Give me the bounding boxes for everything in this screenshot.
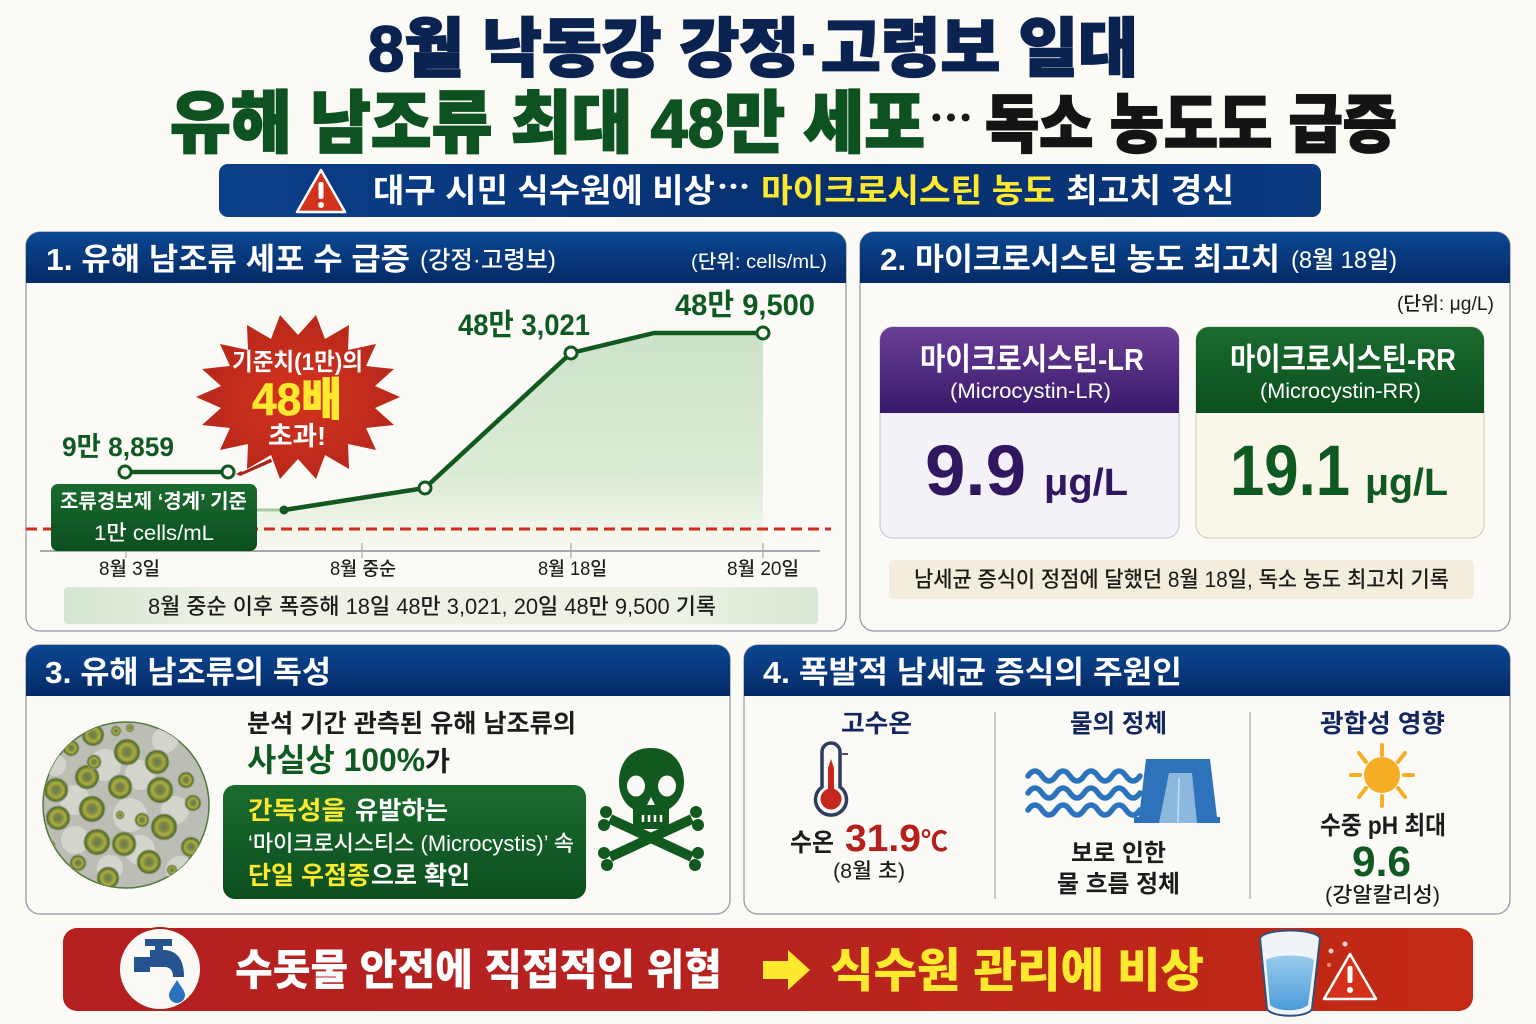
card: microcystin-RR: μg/L: [1365, 462, 1448, 504]
callout: threshold label: 1만 cells/mL: [94, 522, 214, 545]
heading: panel 2: (8월 18일): [1291, 247, 1397, 274]
callout: 48 times starburst: 48배: [252, 374, 342, 425]
callout: hepatotoxic dominant species: ‘마이크로시스티스 (Microcystis)’ 속: [248, 831, 574, 856]
callout: threshold label: [51, 484, 257, 551]
line chart: 48만 3,021: [458, 309, 590, 342]
callout: hepatotoxic dominant species: 으로 확인: [371, 862, 470, 890]
line chart: 8월 중순: [330, 558, 396, 580]
heading: panel 1: 1. 유해 남조류 세포 수 급증: [46, 242, 410, 277]
subtitle banner: 마이크로시스틴 농도: [761, 172, 1055, 209]
heading: panel 1: (강정·고령보): [420, 247, 556, 274]
callout: 48 times starburst: 초과!: [268, 421, 326, 451]
panel 2: microcystin: [860, 232, 1510, 631]
column: stagnant water: 보로 인한: [1071, 840, 1166, 867]
icon: water waves and weir: [1028, 759, 1220, 823]
column: photosynthesis: 수중 pH 최대: [1320, 812, 1446, 840]
callout: threshold label: 조류경보제 ‘경계’ 기준: [60, 490, 247, 513]
card: microcystin-LR: μg/L: [1044, 462, 1128, 504]
column: high water temperature: 고수온: [841, 710, 912, 738]
text: analysis result: 사실상 100%: [247, 742, 425, 778]
icon: warning triangle: [297, 170, 345, 212]
heading: panel 1: (단위: cells/mL): [691, 251, 827, 273]
column: high water temperature: 31.9: [845, 818, 921, 860]
column: photosynthesis: [1320, 710, 1446, 907]
column: stagnant water: 물의 정체: [1070, 710, 1167, 738]
line chart: 48만 9,500: [675, 289, 815, 322]
line chart: 8월 3일: [99, 558, 160, 580]
heading: panel 2: 2. 마이크로시스틴 농도 최고치: [880, 242, 1280, 277]
panel 4: causes: [744, 645, 1510, 914]
icon: warning triangle: [1324, 942, 1376, 999]
chart note: [64, 587, 818, 624]
title: 독소 농도도 급증: [985, 89, 1397, 161]
text: analysis result: 가: [425, 747, 450, 777]
line chart: 8월 20일: [727, 558, 799, 580]
column: high water temperature: 수온: [790, 829, 834, 857]
microscope image of algae: [43, 722, 209, 889]
title: 8월 낙동강 강정·고령보 일대: [368, 13, 1138, 85]
column: photosynthesis: 광합성 영향: [1320, 710, 1445, 738]
card: microcystin-LR: 마이크로시스틴-LR: [920, 342, 1144, 377]
heading: panel 3: 3. 유해 남조류의 독성: [45, 655, 331, 690]
subtitle banner: …: [717, 163, 750, 207]
panel 2 note: [889, 560, 1474, 599]
heading: panel 1: [46, 242, 827, 277]
subtitle banner: [219, 163, 1321, 217]
line chart: 8월 18일: [538, 558, 607, 580]
bottom banner: [63, 928, 1473, 1016]
card: microcystin-RR: [1196, 327, 1484, 538]
chart note: 8월 중순 이후 폭증해 18일 48만 3,021, 20일 48만 9,500 기록: [148, 594, 716, 619]
icon: skull and crossbones: [598, 748, 704, 871]
icon: glass of water: [1260, 930, 1320, 1016]
bottom banner: 식수원 관리에 비상: [830, 944, 1204, 997]
callout: 48 times starburst: [196, 315, 400, 479]
card: microcystin-RR: 19.1: [1230, 432, 1350, 511]
card: microcystin-RR: (Microcystin-RR): [1260, 380, 1421, 403]
title: [170, 13, 1397, 162]
icon: water tap: [119, 928, 201, 1010]
panel 1: cell count: [26, 232, 846, 631]
title: …: [929, 83, 973, 147]
callout: hepatotoxic dominant species: 단일 우점종: [248, 862, 370, 890]
card: microcystin-LR: [880, 327, 1179, 538]
callout: hepatotoxic dominant species: 간독성을: [248, 797, 346, 825]
text: analysis result: 분석 기간 관측된 유해 남조류의: [247, 710, 576, 738]
title: 유해 남조류 최대 48만 세포: [170, 86, 925, 162]
unit label: (단위: μg/L): [1397, 293, 1494, 315]
column: high water temperature: [790, 710, 948, 883]
line chart: 9만 8,859: [62, 432, 174, 462]
card: microcystin-LR: (Microcystin-LR): [950, 380, 1111, 403]
column: stagnant water: 물 흐름 정체: [1057, 871, 1180, 898]
callout: hepatotoxic dominant species: [223, 785, 586, 899]
card: microcystin-LR: 9.9: [925, 432, 1026, 511]
subtitle banner: 대구 시민 식수원에 비상: [373, 172, 715, 209]
line chart: [26, 289, 831, 580]
callout: 48 times starburst: 기준치(1만)의: [232, 349, 363, 376]
bottom banner: 수돗물 안전에 직접적인 위협: [235, 947, 722, 995]
panel 3: toxicity: [26, 645, 730, 914]
column: photosynthesis: (강알칼리성): [1325, 884, 1440, 907]
panel 2 note: 남세균 증식이 정점에 달했던 8월 18일, 독소 농도 최고치 기록: [914, 567, 1449, 592]
icon: thermometer: [815, 743, 848, 815]
column: stagnant water: [1028, 710, 1220, 898]
card: microcystin-RR: 마이크로시스틴-RR: [1230, 342, 1456, 377]
arrow: [763, 950, 810, 990]
column: high water temperature: (8월 초): [833, 860, 905, 883]
column: photosynthesis: 9.6: [1352, 838, 1411, 886]
callout: hepatotoxic dominant species: 유발하는: [355, 797, 448, 825]
heading: panel 4: 4. 폭발적 남세균 증식의 주원인: [763, 655, 1182, 690]
subtitle banner: 최고치 경신: [1066, 172, 1234, 209]
column: high water temperature: ℃: [921, 826, 948, 857]
icon: sun: [1351, 745, 1413, 806]
text: analysis result: [247, 710, 576, 778]
